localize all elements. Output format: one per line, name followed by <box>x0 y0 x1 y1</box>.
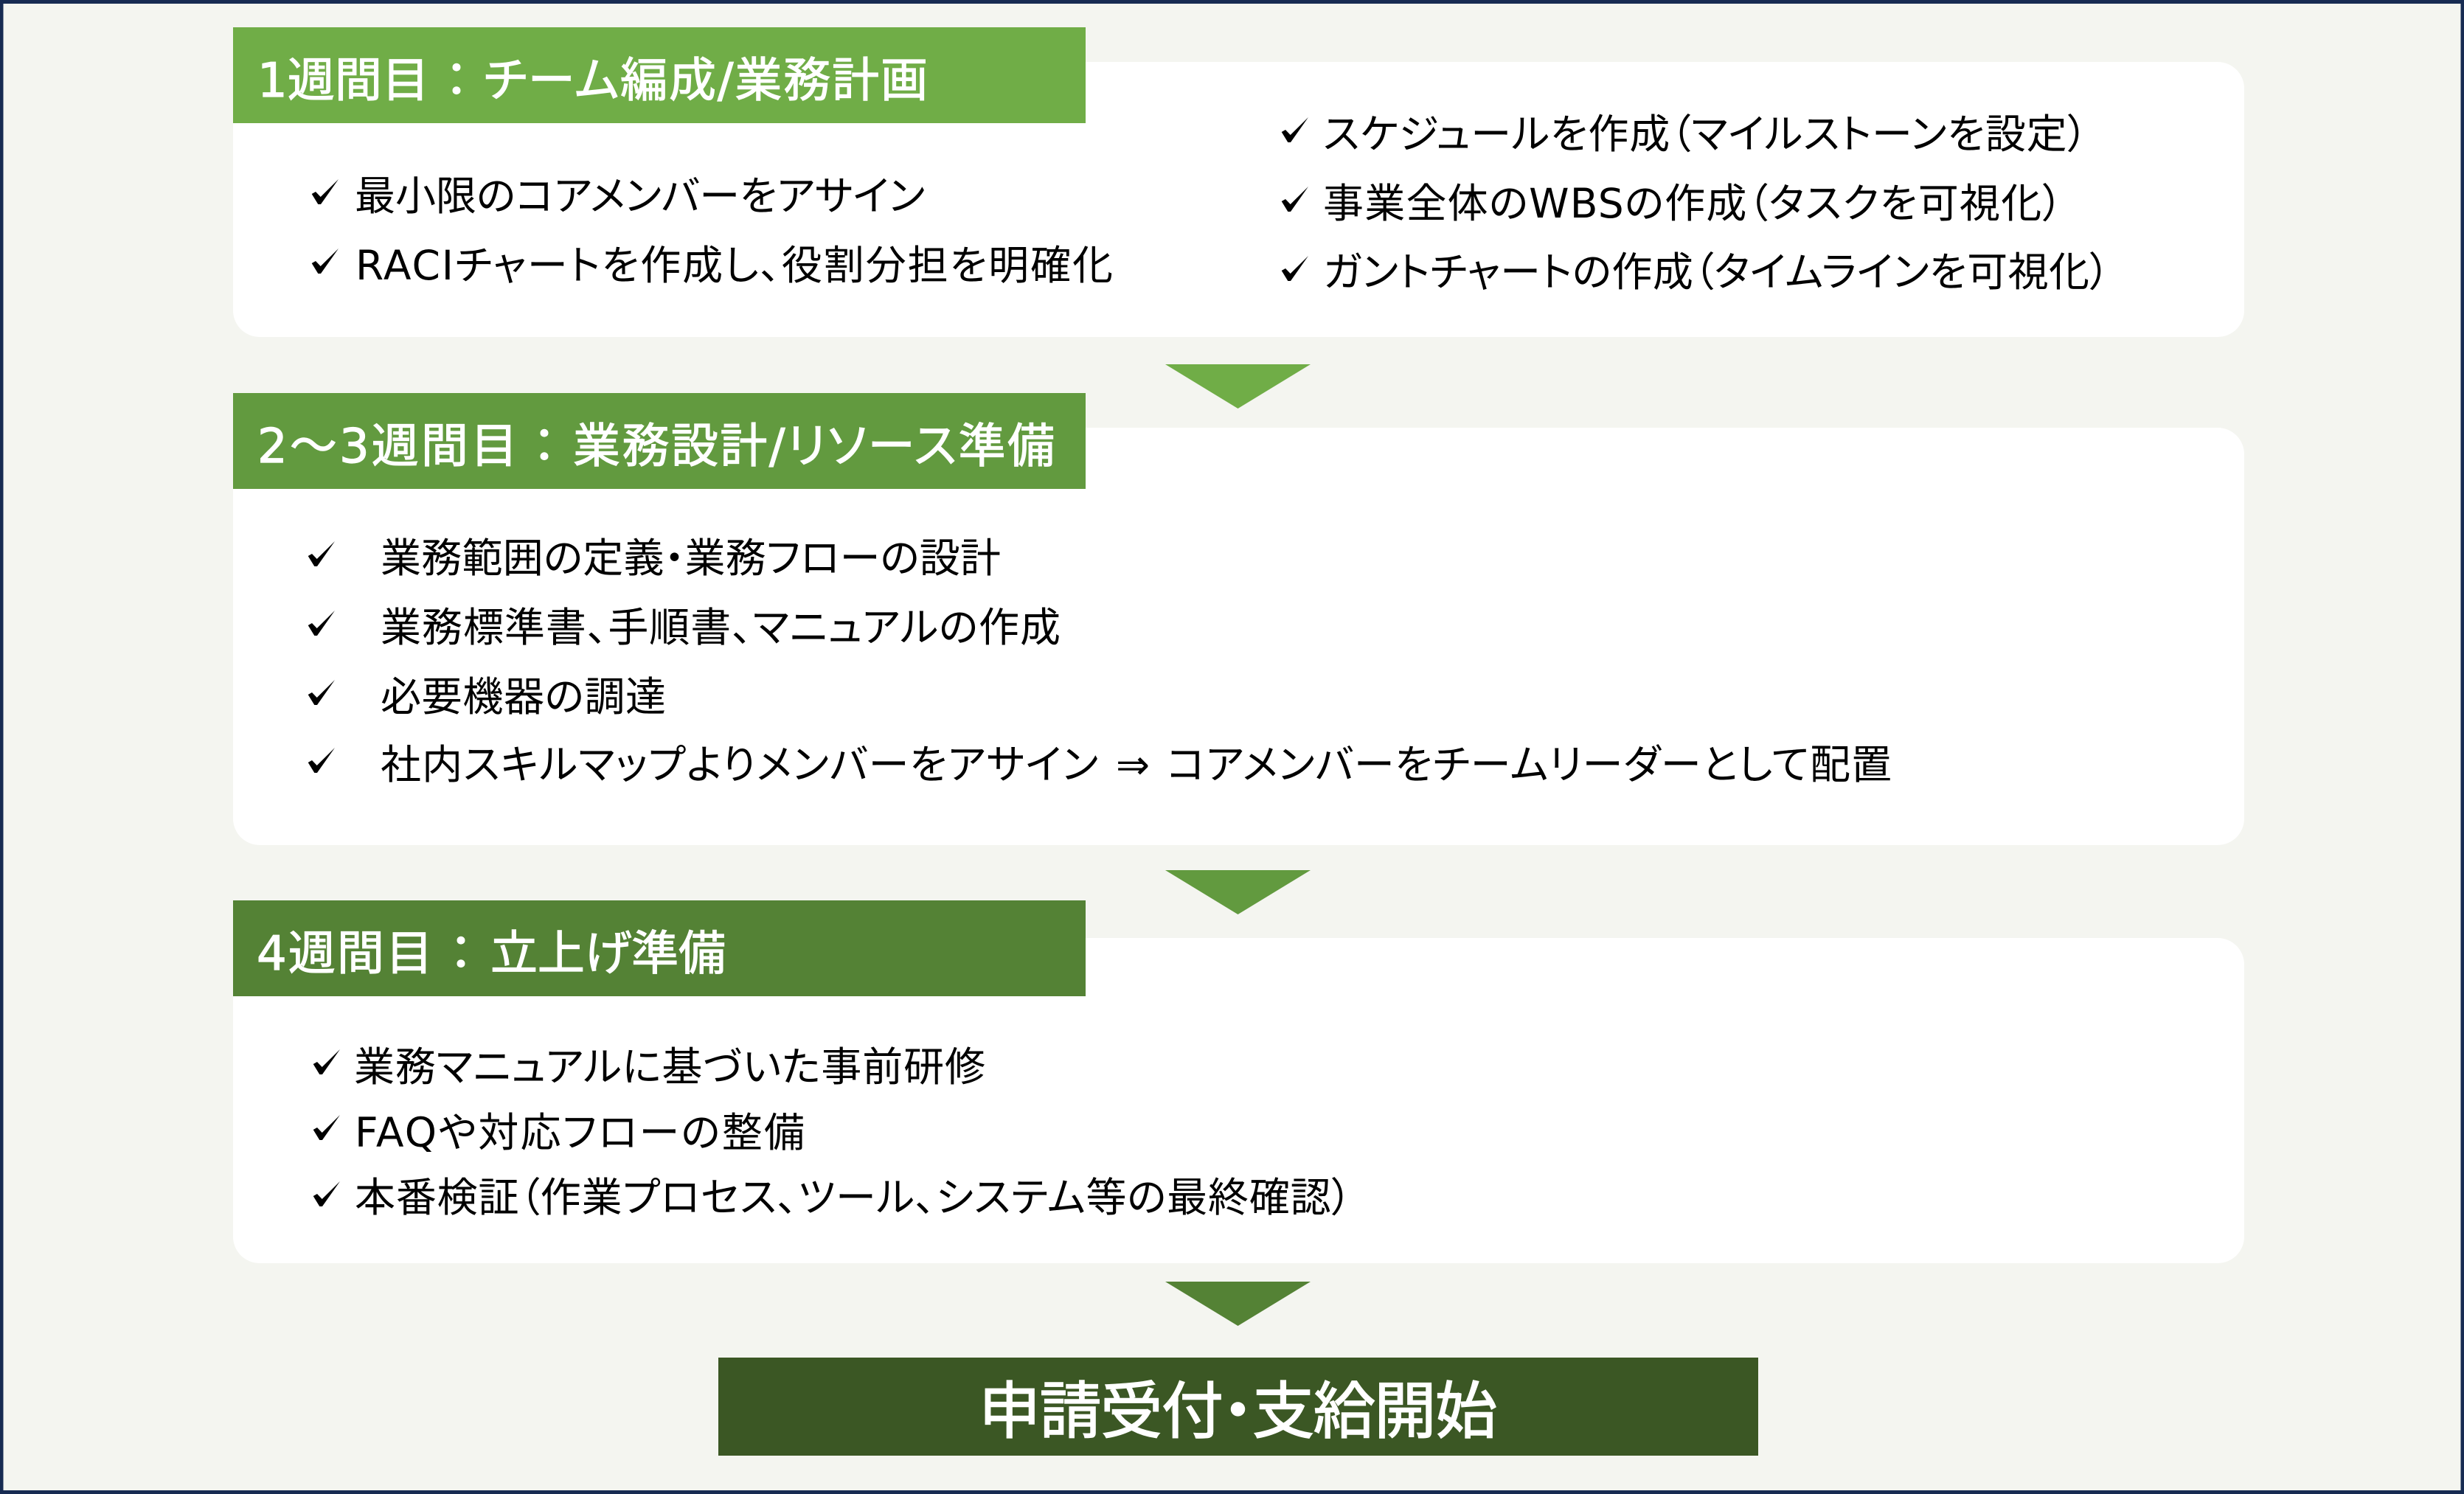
arrow: week 1 to week 2 <box>1165 364 1311 409</box>
arrow: week 2-3 to week 4 <box>1165 870 1311 914</box>
heading: week 1: ： <box>445 54 468 108</box>
list: weeks 2-3: ⇒ <box>1116 741 1150 788</box>
heading: weeks 2-3: 業務設計/リソース準備 <box>573 420 1055 474</box>
list: week 1 left: 最小限のコアメンバーをアサイン <box>355 173 925 220</box>
heading: week 1: 1週間目 <box>257 54 429 108</box>
panel: week 1 <box>233 27 2244 337</box>
heading: week 4: 4週間目 <box>257 927 433 981</box>
heading: week 4 <box>233 900 1086 996</box>
list: weeks 2-3: 必要機器の調達 <box>381 673 666 720</box>
list: week 1 left <box>312 173 1113 289</box>
list: weeks 2-3 <box>308 535 1892 788</box>
panel: weeks 2-3 <box>233 393 2244 845</box>
list: week 1 right: スケジュールを作成（マイルストーンを設定） <box>1323 111 2088 158</box>
heading: weeks 2-3: ： <box>532 420 556 474</box>
heading: week 1 <box>233 27 1086 123</box>
list: week 1 left: RACIチャートを作成し、役割分担を明確化 <box>355 242 1113 289</box>
list: week 4: 業務マニュアルに基づいた事前研修 <box>354 1043 985 1091</box>
list: week 4: FAQや対応フローの整備 <box>355 1109 805 1156</box>
list: weeks 2-3: コアメンバーをチームリーダーとして配置 <box>1167 741 1892 788</box>
heading: week 4: ： <box>449 927 473 981</box>
arrow: week 4 to start <box>1165 1282 1311 1326</box>
list: week 4: 本番検証（作業プロセス、ツール、システム等の最終確認） <box>355 1174 1352 1221</box>
panel: week 4 <box>233 900 2244 1263</box>
heading: weeks 2-3 <box>233 393 1086 489</box>
heading: week 4: 立上げ準備 <box>490 927 726 981</box>
list: weeks 2-3: 業務標準書、手順書、マニュアルの作成 <box>381 604 1061 651</box>
callout: application start <box>718 1358 1758 1456</box>
list: week 1 right: ガントチャートの作成（タイムラインを可視化） <box>1323 249 2110 296</box>
list: weeks 2-3: 業務範囲の定義・業務フローの設計 <box>381 535 1001 582</box>
list: weeks 2-3: 社内スキルマップよりメンバーをアサイン <box>381 741 1098 788</box>
list: week 4 <box>313 1043 1352 1221</box>
heading: week 1: チーム編成/業務計画 <box>484 54 928 108</box>
callout: application start: 申請受付・支給開始 <box>979 1375 1497 1448</box>
list: week 1 right <box>1282 111 2110 296</box>
heading: weeks 2-3: 2～3週間目 <box>257 420 518 474</box>
list: week 1 right: 事業全体のWBSの作成（タスクを可視化） <box>1323 180 2063 227</box>
